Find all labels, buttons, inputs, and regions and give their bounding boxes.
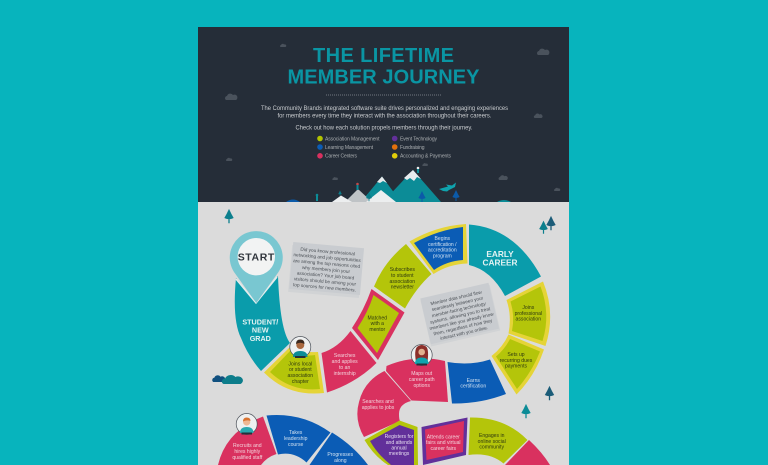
step: takes leadership: [266, 415, 330, 462]
step: early career: [469, 224, 541, 296]
note: professional networking: association? Your job board: [297, 270, 355, 281]
note: professional networking: top sources for new members.: [293, 282, 356, 293]
step: subscribes newsletter: [374, 244, 432, 308]
step: earns certification: Earns: [467, 378, 480, 384]
step: recruits staff: [218, 416, 276, 465]
clouds in the sky: [225, 44, 560, 191]
header panel: [198, 27, 569, 202]
label: student new grad: STUDENT/: [242, 318, 278, 326]
label: start: START: [238, 252, 275, 264]
note: professional networking: visitors should be among your: [294, 276, 357, 287]
note: member data: seamlessly between your: [431, 295, 484, 312]
step: recruits staff: hires highly: [234, 449, 261, 455]
icon: plane: [439, 182, 456, 192]
legend: [317, 136, 452, 160]
label: student new grad: NEW: [252, 326, 269, 335]
note: professional networking: why members join your: [302, 265, 351, 274]
step: engages community: Engages in: [479, 433, 505, 439]
step: joins local chapter: association: [288, 373, 313, 379]
note: member data: member-facing technology: [431, 301, 487, 318]
step: earns certification: certification: [460, 384, 486, 390]
note: professional networking: Did you know professional: [300, 247, 355, 256]
step: matched mentor: with a: [371, 321, 384, 327]
step: recruits staff: Recruits and: [233, 443, 262, 449]
step: takes leadership: course: [288, 442, 304, 448]
step: maps career path: Maps out: [411, 371, 433, 377]
step: searches jobs: applies to jobs: [362, 405, 395, 411]
step: searches jobs: [357, 371, 411, 437]
legend: Association Management: [325, 136, 380, 142]
avatar: staff: [236, 414, 257, 434]
step: joins professional association: association: [516, 317, 541, 323]
step: sets up dues: payments: [505, 364, 527, 370]
step: registers meetings: Registers for: [385, 434, 414, 440]
step: searches internship: and applies: [332, 359, 358, 365]
legend: Accounting & Payments: [400, 154, 452, 160]
step: sets up dues: recurring dues: [500, 358, 533, 364]
legend: Event Technology: [400, 136, 438, 142]
step: registers meetings: [364, 420, 418, 465]
step: progresses: Progresses: [327, 452, 354, 458]
step: subscribes newsletter: Subscribes: [390, 267, 415, 273]
legend: Fundraising: [400, 145, 425, 151]
step: engages community: community: [479, 444, 504, 450]
note: member data: systems, allowing you to treat: [430, 306, 491, 325]
step: registers meetings: meetings: [389, 451, 410, 457]
step: attends career fairs: career fairs: [431, 446, 456, 452]
step: crimson next: [505, 440, 550, 465]
step: maps career path: career path: [409, 377, 435, 383]
step: early career: EARLY: [486, 249, 514, 259]
avatar: woman: [411, 344, 432, 366]
step: earns certification: [448, 360, 506, 404]
intro text: Check out how each solution propels members through their journey.: [296, 124, 473, 132]
step: engages community: [468, 417, 528, 464]
step: begins certification: accreditation: [428, 248, 457, 254]
step: subscribes newsletter: newsletter: [391, 284, 414, 290]
note: member data: members like you already know: [429, 311, 495, 331]
pin: start: [230, 231, 290, 371]
trees and clouds on the board: [212, 209, 556, 418]
label: student new grad: [242, 318, 278, 343]
step: joins local chapter: chapter: [292, 379, 309, 385]
intro text: [261, 105, 508, 132]
step: begins certification: [410, 224, 468, 274]
step: matched mentor: [352, 289, 404, 360]
step: joins local chapter: or student: [289, 367, 312, 373]
step: begins certification: certification /: [428, 242, 457, 248]
step: maps career path: options: [413, 383, 430, 389]
step: begins certification: Begins: [435, 236, 451, 242]
title: MEMBER JOURNEY: [288, 66, 480, 88]
note: professional networking: are among the top reasons cited: [293, 258, 361, 269]
step: takes leadership: Takes: [289, 430, 303, 436]
poster: body: [198, 201, 569, 465]
step: engages community: online social: [478, 439, 506, 445]
title: THE LIFETIME: [313, 45, 454, 67]
step: maps career path: [386, 358, 448, 402]
step: subscribes newsletter: association: [390, 279, 415, 285]
step: searches internship: to an: [339, 365, 351, 371]
legend: Career Centers: [325, 154, 358, 160]
note: member data: Member data should flow: [430, 289, 483, 306]
mountains: [286, 167, 511, 202]
step: sets up dues: [492, 334, 544, 394]
step: joins professional association: [506, 282, 550, 346]
step: progresses: along: [334, 458, 347, 464]
step: subscribes newsletter: to student: [391, 273, 414, 279]
step: early career: CAREER: [482, 257, 518, 267]
step: searches internship: internship: [334, 371, 356, 377]
step: attends career fairs: [422, 418, 468, 465]
note: member data: interact with you online.: [440, 325, 489, 341]
step: attends career fairs: fairs and virtual: [426, 440, 461, 446]
step: takes leadership: leadership: [284, 436, 308, 442]
step: searches jobs: Searches and: [362, 399, 394, 405]
legend: Learning Management: [325, 145, 374, 151]
note: member data: them, regardless of how they: [433, 318, 493, 336]
note: member data: [420, 283, 500, 347]
label: student new grad: GRAD: [250, 334, 271, 343]
step: joins local chapter: [264, 347, 324, 394]
step: begins certification: program: [433, 254, 452, 260]
step: sets up dues: Sets up: [507, 352, 525, 358]
note: professional networking: [288, 242, 364, 298]
step: recruits staff: qualified staff: [232, 455, 263, 461]
step: registers meetings: and attends: [386, 440, 413, 446]
step: joins professional association: Joins: [522, 305, 535, 311]
step: matched mentor: mentor: [369, 327, 386, 333]
avatar: man: [290, 336, 311, 358]
note: professional networking: networking and job opportunities: [293, 252, 362, 263]
intro text: for members every time they interact with the association throughout their careers.: [278, 112, 492, 120]
step: searches internship: [322, 331, 376, 392]
step: progresses: [310, 432, 368, 465]
step: joins local chapter: Joins local: [288, 362, 312, 368]
title: [288, 45, 480, 88]
step: attends career fairs: Attends career: [427, 434, 460, 440]
step: joins professional association: professional: [515, 311, 542, 317]
intro text: The Community Brands integrated software suite drives personalized and engaging experiences: [261, 105, 508, 112]
step: registers meetings: annual: [391, 446, 407, 452]
step: matched mentor: Matched: [368, 316, 387, 322]
step: searches internship: Searches: [334, 353, 356, 359]
